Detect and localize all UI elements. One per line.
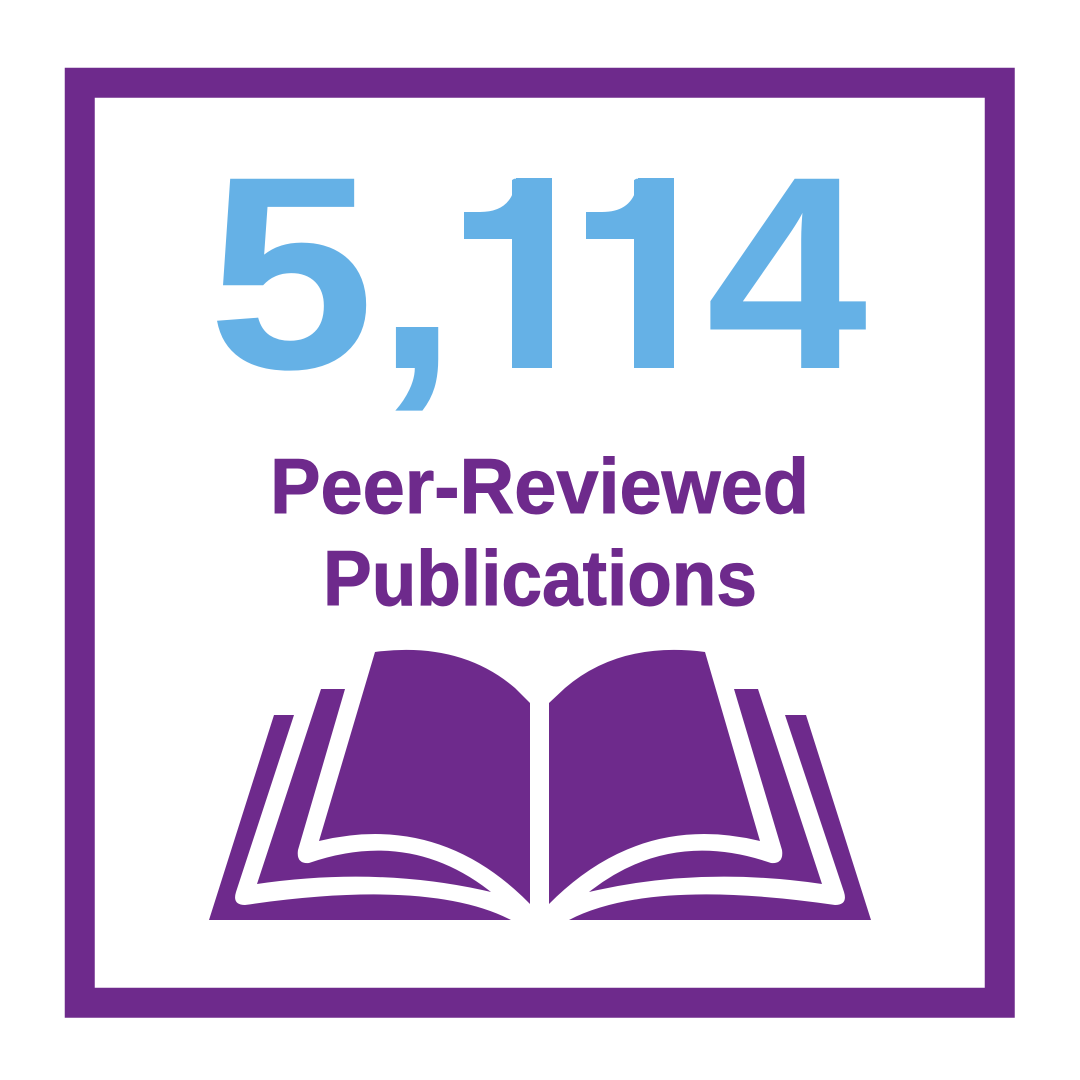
icon: open book (209, 650, 871, 920)
big number: 1 (565, 120, 729, 427)
label: Peer-Reviewed Publications: Publications (323, 534, 757, 622)
big number: 1 (443, 120, 607, 427)
label: Peer-Reviewed Publications: Peer-Reviewed (270, 442, 809, 530)
infographic card (64, 68, 1015, 1018)
big number: 5 (208, 119, 375, 426)
purple square frame (80, 83, 1000, 1003)
big number: 4 (706, 119, 869, 426)
label: Peer-Reviewed Publications (270, 442, 809, 622)
big number: , (375, 119, 458, 426)
big number (217, 178, 866, 411)
